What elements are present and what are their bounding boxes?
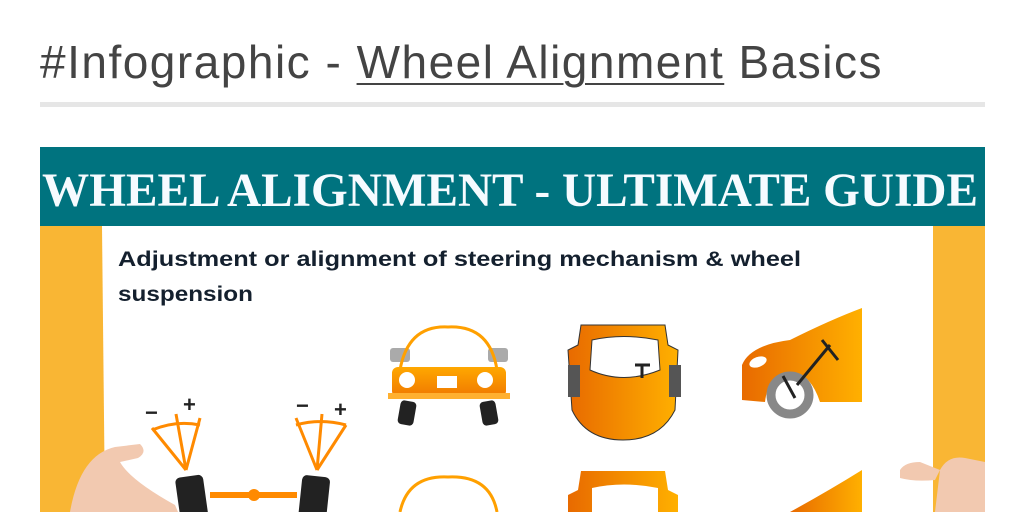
heading divider [40,102,985,107]
icon: camber axle: + [183,392,196,417]
icon: car front [388,327,510,426]
subtitle: suspension [118,283,253,306]
hand left [70,444,178,512]
icon: camber axle: + [334,397,347,422]
icons row 2 (partial) [400,470,862,512]
page heading: #Infographic - Wheel Alignment Basics [40,36,883,88]
icon: car side with wheel [742,308,862,414]
subtitle: Adjustment or alignment of steering mechanism & wheel [118,248,801,271]
banner: WHEEL ALIGNMENT - ULTIMATE GUIDE [42,164,978,217]
icon: camber axle: − [145,400,158,425]
icon: car top view [568,325,681,440]
icon: camber axle [145,392,347,512]
banner [40,147,985,226]
subtitle [118,248,801,306]
icon: camber axle: − [296,393,309,418]
hand right [900,458,985,512]
